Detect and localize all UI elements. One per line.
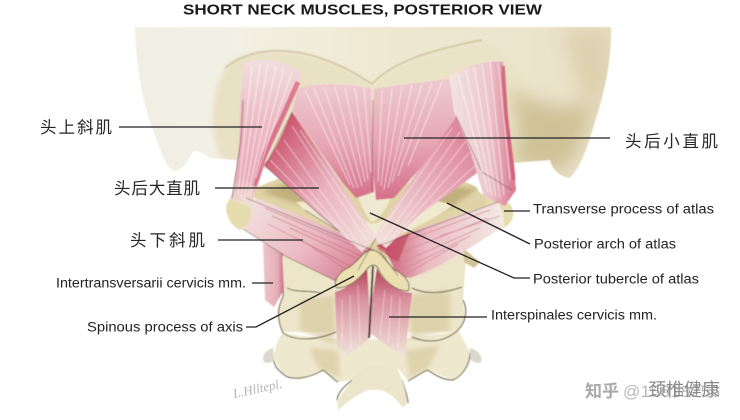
cervical vertebrae [263,222,481,410]
label: posterior arch of atlas: Posterior arch of atlas [534,236,676,252]
right transverse process [486,198,513,228]
posterior arch of atlas [296,200,452,240]
interspinalis fibres [342,285,400,350]
left inferior oblique fibres [265,208,368,272]
left intertransversarii muscle [263,243,284,307]
label: posterior tubercle of atlas: Posterior tubercle of atlas [533,272,699,288]
C3 spinous process highlight [338,365,406,410]
label: interspinales cervicis: Interspinales cervicis mm. [491,308,657,324]
label: transverse process of atlas: Transverse process of atlas [533,202,714,218]
watermark: platform name: 知乎 [585,377,619,402]
muscle: left interspinalis [335,267,371,355]
right superior oblique red edge [503,66,514,180]
vertebra joint outlines [273,250,470,403]
posterior tubercle of atlas [356,178,394,222]
muscle: right interspinalis [370,268,412,355]
vertebra shading [300,290,450,378]
rectus major fibres [270,126,476,246]
muscle: right rectus major [373,116,481,248]
spinous process of axis [335,250,409,291]
muscle: left inferior oblique [243,198,374,281]
label: intertransversarii cervicis: Intertransversarii cervicis mm. [56,276,246,292]
label: rectus capitis posterior minor: 头后小直肌 [625,128,718,152]
upper atlas region [250,170,505,262]
label: spinous process of axis: Spinous process of axis [87,320,243,336]
right skull tan shadow [505,90,596,172]
right occipital shading [375,64,412,88]
muscle: right inferior oblique [376,202,504,278]
label: inferior oblique: 头下斜肌 [130,227,205,251]
right inferior oblique fibres [392,210,500,274]
skull base [135,27,611,200]
anatomical illustration [135,27,611,410]
right intertransversarii tissue [463,248,480,268]
muscle boundary shadows [243,112,512,281]
label: spinous process of axis [87,276,354,336]
muscle: left rectus major [264,112,376,252]
muscle: left rectus minor [292,84,374,198]
upper right tan [562,28,611,100]
left superior oblique red edge [254,82,298,186]
artist signature: L.Hlltepl. [231,376,283,401]
watermark: overlaid name: 颈椎健康 [648,376,720,402]
superior oblique fibres [238,62,510,200]
label: superior oblique: 头上斜肌 [40,114,112,138]
left transverse process [226,195,256,230]
muscle: right superior oblique [449,62,516,206]
atlas shadow [262,178,478,208]
left C3 transverse tip [263,348,274,363]
label: posterior tubercle of atlas [370,213,699,288]
right C3 transverse tip [470,348,481,363]
rectus minor dark cleft [372,100,373,192]
watermark: user handle: @15618256 [623,382,720,401]
occipital ridge [225,40,482,84]
muscle: right rectus minor [371,78,458,200]
vertebra C3 block [273,330,470,410]
watermark [585,376,720,402]
left occipital shading [212,51,372,190]
interspinalis centre cleft [369,266,373,338]
right inferior oblique red core [378,232,410,262]
vertebra C2 block [277,222,466,332]
left superior oblique dark border [232,100,243,198]
right atlas foramen [475,178,486,196]
muscle: left superior oblique [231,60,302,207]
rectus minor fibres [305,82,442,190]
label: posterior arch of atlas [447,203,676,252]
skull shading [212,30,611,190]
title: SHORT NECK MUSCLES, POSTERIOR VIEW [183,2,542,18]
label: rectus capitis posterior major: 头后大直肌 [114,175,200,199]
